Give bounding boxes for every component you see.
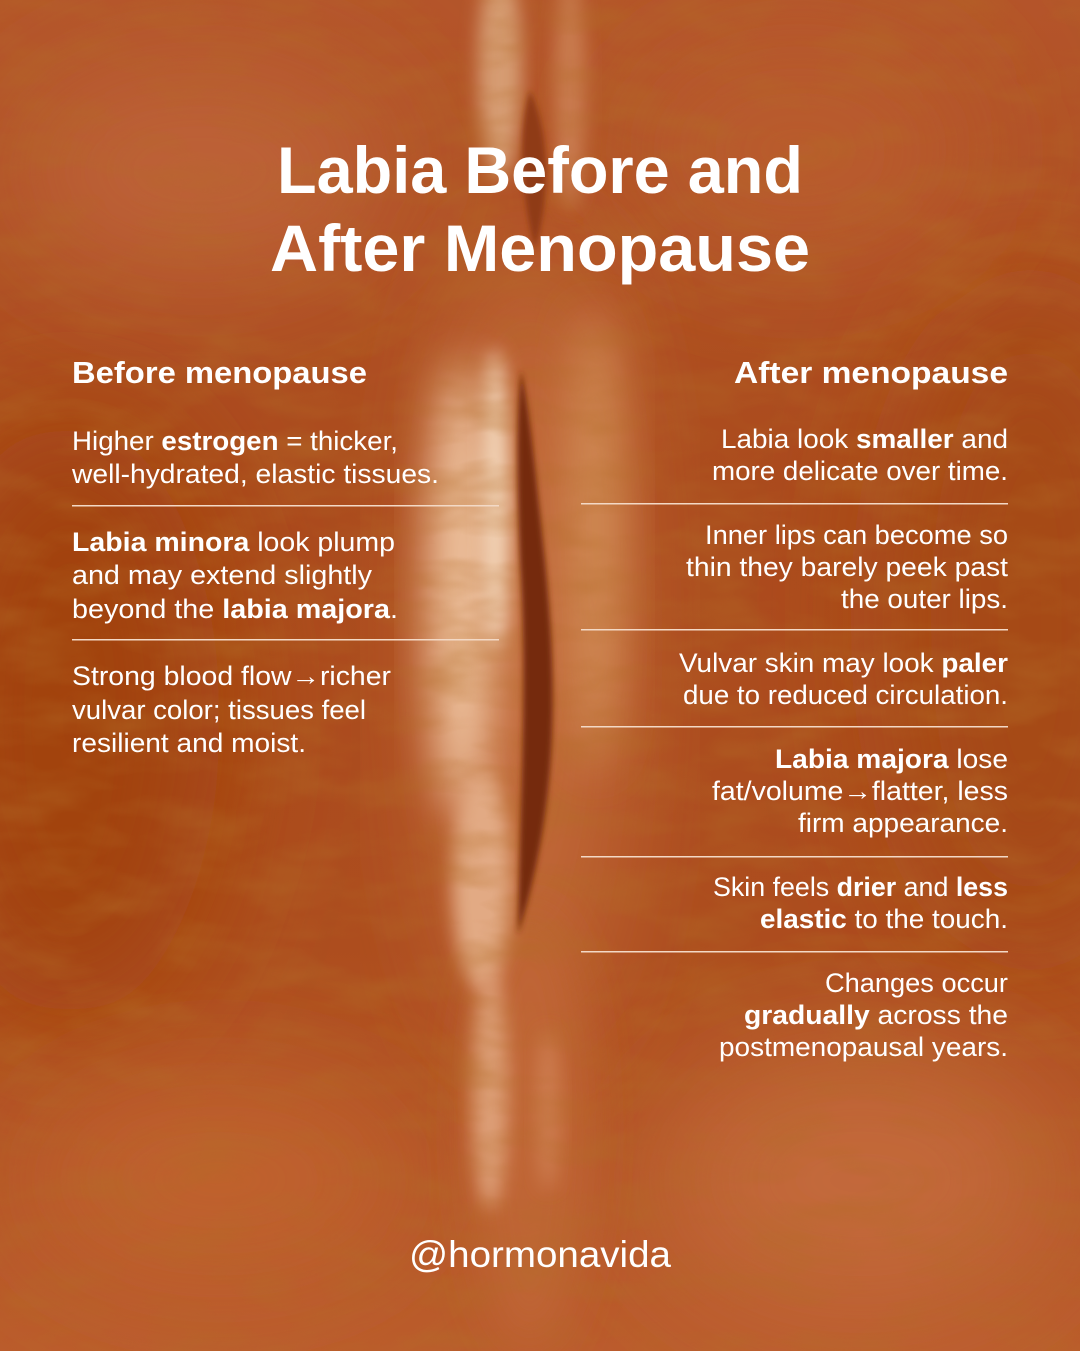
text: blood flow: vulvar color; tissues feel bbox=[72, 695, 366, 725]
text: blood flow: resilient and moist. bbox=[72, 728, 306, 758]
text: gradually bbox=[719, 968, 1008, 1062]
text: blood flow bbox=[72, 661, 391, 758]
text: drier bbox=[713, 872, 1008, 934]
title: Labia Before and bbox=[277, 133, 803, 207]
text: labia minora: beyond the labia majora . bbox=[72, 594, 398, 624]
heading: before menopause: Before menopause bbox=[72, 355, 367, 390]
text: labia majora: Labia majora lose bbox=[775, 744, 1008, 774]
text: estrogen: well-hydrated, elastic tissues. bbox=[71, 459, 439, 489]
text: smaller: Labia look smaller and bbox=[721, 424, 1008, 454]
text: smaller: more delicate over time. bbox=[712, 456, 1008, 486]
text: paler: Vulvar skin may look paler bbox=[679, 648, 1008, 678]
text: paler bbox=[679, 648, 1008, 710]
handle: @hormonavida bbox=[409, 1234, 671, 1275]
text: labia minora bbox=[72, 527, 398, 624]
panel: before menopause bbox=[71, 355, 499, 758]
title: After Menopause bbox=[270, 211, 810, 285]
text: gradually: postmenopausal years. bbox=[719, 1032, 1008, 1062]
heading: after menopause: After menopause bbox=[734, 355, 1008, 390]
text: labia majora: fat/volume→flatter, less bbox=[712, 776, 1008, 806]
text: estrogen: Higher estrogen = thicker, bbox=[72, 426, 398, 456]
text: drier: Skin feels drier and less bbox=[713, 872, 1008, 902]
text: labia minora: Labia minora look plump bbox=[72, 527, 395, 557]
text: drier: elastic to the touch. bbox=[760, 904, 1008, 934]
text: inner lips: thin they barely peek past bbox=[686, 552, 1009, 582]
text: inner lips bbox=[686, 520, 1009, 614]
text: inner lips: the outer lips. bbox=[841, 584, 1008, 614]
text: gradually: Changes occur bbox=[825, 968, 1008, 998]
text: blood flow: Strong blood flow→richer bbox=[72, 661, 391, 691]
text: labia majora: firm appearance. bbox=[798, 808, 1008, 838]
text: labia majora bbox=[712, 744, 1008, 838]
text: paler: due to reduced circulation. bbox=[683, 680, 1008, 710]
panel: after menopause bbox=[581, 355, 1009, 1062]
text: smaller bbox=[712, 424, 1008, 486]
title bbox=[270, 133, 810, 285]
text: estrogen bbox=[71, 426, 439, 489]
text: gradually: gradually across the bbox=[744, 1000, 1008, 1030]
text: inner lips: Inner lips can become so bbox=[705, 520, 1008, 550]
text: labia minora: and may extend slightly bbox=[72, 560, 373, 590]
